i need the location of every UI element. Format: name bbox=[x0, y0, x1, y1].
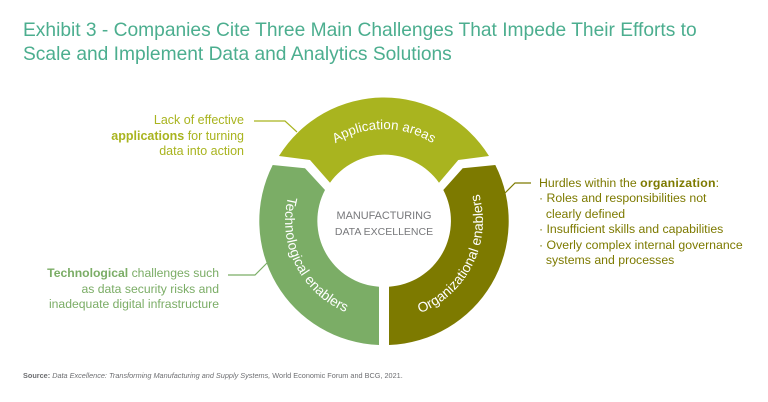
center label bbox=[335, 210, 433, 238]
callout: applications: applications for turning bbox=[111, 128, 244, 142]
segment: organizational enablers bbox=[389, 165, 509, 345]
callout: technological: as data security risks and bbox=[81, 282, 219, 296]
segment: technological enablers bbox=[259, 165, 379, 345]
callout: organization: clearly defined bbox=[546, 207, 625, 221]
callout: organization: · Insufficient skills and capabilities bbox=[539, 222, 723, 236]
callout: applications bbox=[111, 113, 244, 158]
callout: organization bbox=[539, 176, 743, 267]
title: Scale and Implement Data and Analytics Solutions bbox=[23, 44, 452, 65]
source note: Source: Data Excellence: Transforming Manufacturing and Supply Systems, World Economic Forum and BCG, 2021. bbox=[23, 371, 403, 380]
center label: MANUFACTURING bbox=[336, 210, 432, 222]
callout: technological: inadequate digital infrastructure bbox=[49, 297, 219, 311]
segment: application areas bbox=[279, 98, 489, 183]
callout: applications: Lack of effective bbox=[154, 113, 244, 127]
callout: technological bbox=[47, 266, 219, 311]
callout: organization: · Roles and responsibilities not bbox=[539, 191, 706, 205]
segment: organizational enablers: Organizational enablers bbox=[418, 194, 484, 312]
segment: application areas: Application areas bbox=[334, 120, 435, 144]
title: Exhibit 3 - Companies Cite Three Main Challenges That Impede Their Efforts to bbox=[23, 20, 697, 41]
title bbox=[23, 20, 697, 65]
segment: technological enablers: Technological enablers bbox=[285, 198, 348, 312]
connector: applications bbox=[254, 121, 297, 132]
connector: organization bbox=[505, 183, 531, 193]
callout: organization: · Overly complex internal governance bbox=[539, 238, 743, 252]
callout: applications: data into action bbox=[159, 144, 244, 158]
connector: technological bbox=[228, 263, 267, 275]
callout: technological: Technological challenges such bbox=[47, 266, 219, 280]
callout: organization: Hurdles within the organization: bbox=[539, 176, 719, 190]
callout: organization: systems and processes bbox=[546, 253, 674, 267]
center label: DATA EXCELLENCE bbox=[335, 226, 433, 238]
